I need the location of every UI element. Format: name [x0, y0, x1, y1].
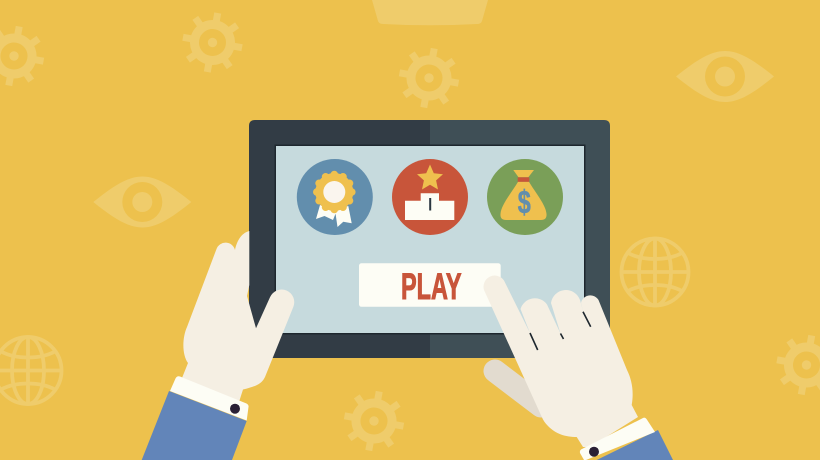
play label: PLAY: [401, 266, 462, 307]
left cuff button: [230, 404, 240, 414]
icon: globe right: [622, 238, 688, 306]
icon: gear upper centre: [394, 43, 464, 113]
tablet screen: [274, 144, 586, 334]
icon: award badge: [297, 159, 373, 235]
icon: money bag: $: [518, 184, 531, 220]
tablet frame left half: [249, 120, 430, 358]
icon: gear top left: [0, 21, 49, 91]
left hand: [142, 231, 294, 460]
icon: money bag: [487, 159, 563, 235]
left hand palm and fingers: [182, 231, 294, 402]
right hand: [484, 276, 673, 460]
right cuff button: [589, 447, 599, 457]
icon: eye right: [676, 51, 774, 102]
tablet frame right half: [430, 120, 610, 358]
icon: podium and star: [392, 159, 468, 235]
left cuff: [170, 376, 249, 420]
icon: gear upper left: [178, 8, 247, 77]
icon: cropped shape at top: [372, 0, 488, 25]
right thumb behind: [495, 371, 541, 406]
icon: gear bottom centre: [339, 386, 409, 456]
icon: eye left: [93, 176, 191, 228]
finger crease lines: [530, 312, 591, 350]
right sleeve: [597, 430, 673, 460]
icon: gear right edge: [772, 330, 820, 400]
play button: [359, 263, 501, 307]
tablet: [249, 120, 610, 358]
left sleeve: [142, 391, 247, 460]
right cuff: [580, 418, 655, 460]
icon: globe left: [0, 337, 62, 404]
right palm and fingers: [484, 276, 638, 447]
